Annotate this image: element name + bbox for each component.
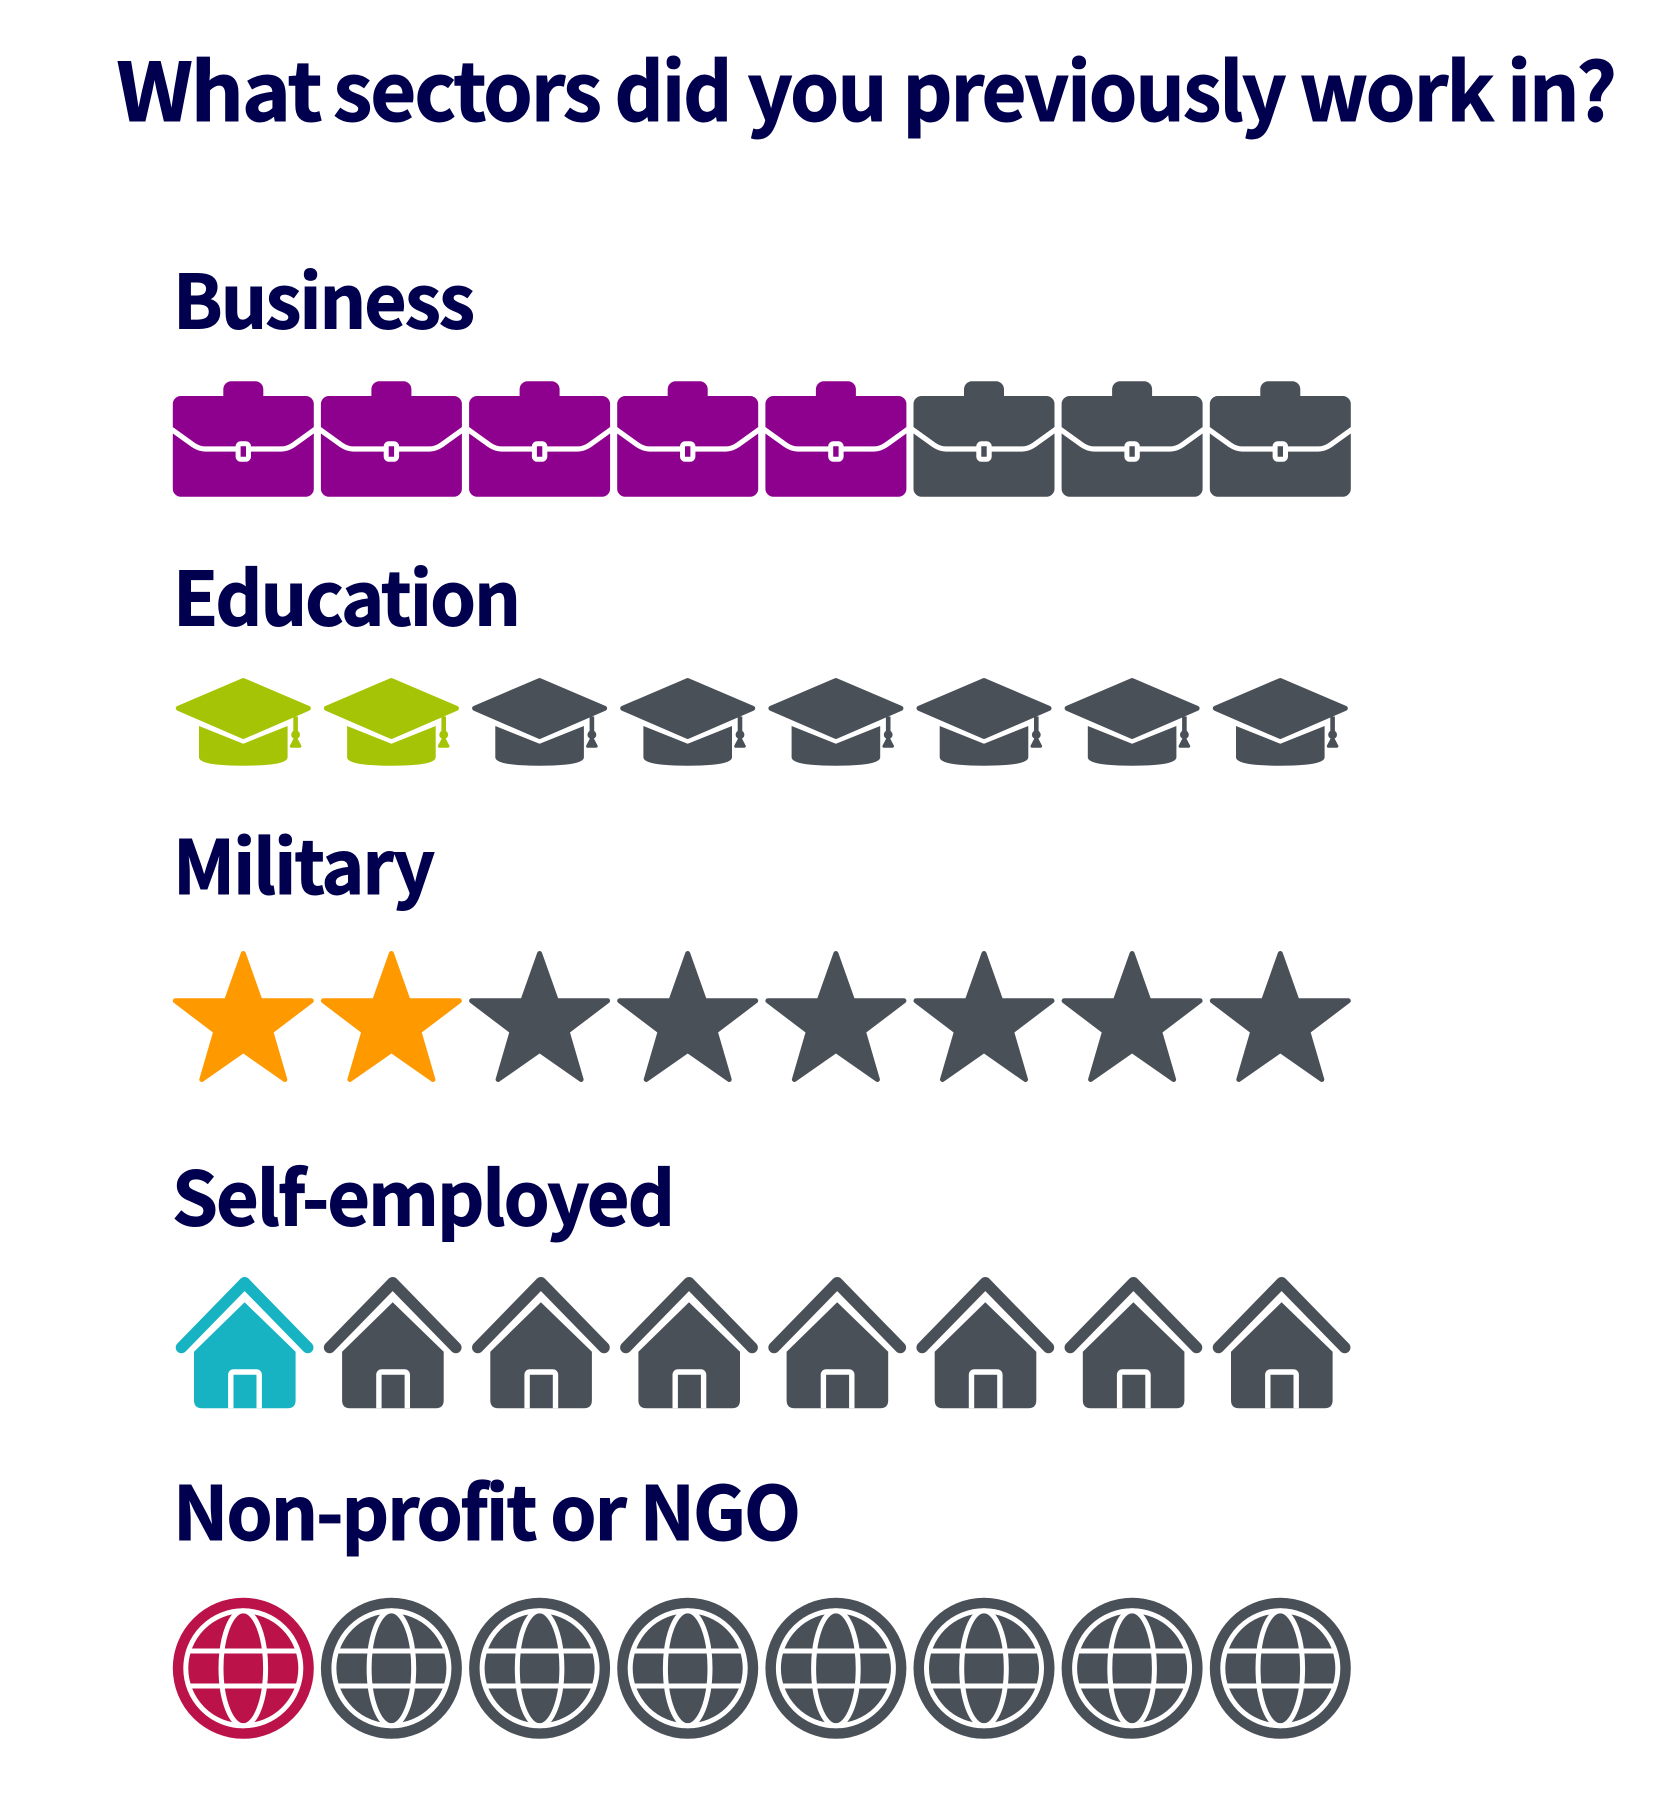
icon: graduation cap 1 [178,680,308,766]
icon: briefcase 1 [169,381,317,497]
icon: briefcase 5 [762,381,910,497]
icon: briefcase 2 [317,381,465,497]
icon: star 2 [323,954,459,1080]
icon: globe 7 [1062,1598,1203,1739]
title: in? [1507,29,1615,145]
heading: Non-profit or NGO: Non-profit or NGO [173,1455,799,1562]
heading: Self-employed: Self-employed [172,1140,673,1248]
icon: globe 4 [617,1598,758,1739]
icon: briefcase 6 [910,381,1058,497]
icon: star 8 [1212,954,1348,1080]
icon: house 8 [1218,1283,1345,1408]
icon: star 7 [1064,954,1200,1080]
icon: globe 8 [1210,1598,1351,1739]
title: sectors [333,29,600,145]
row: Self-employed icons, 1 of 8 highlighted [182,1283,1345,1408]
icon: house 1 [182,1283,308,1408]
heading: Education: Education [173,540,519,648]
title: work [1300,29,1494,145]
icon: graduation cap 6 [919,680,1049,766]
icon: house 3 [478,1283,604,1408]
title: did [614,29,730,145]
icon: briefcase 8 [1206,381,1354,497]
title: What [116,29,322,145]
icon: briefcase 4 [614,381,762,497]
icon: star 4 [620,954,756,1080]
icon: graduation cap 8 [1215,680,1345,766]
icon: globe 2 [321,1598,462,1739]
icon: globe 5 [765,1598,906,1739]
icon: star 1 [175,954,311,1080]
icon: graduation cap 2 [326,680,456,766]
icon: star 3 [472,954,608,1080]
icon: graduation cap 3 [475,680,605,766]
icon: graduation cap 4 [623,680,753,766]
icon: house 5 [774,1283,900,1408]
row: Education icons, 2 of 8 highlighted [178,680,1345,766]
icon: globe 3 [469,1598,610,1739]
row: Military icons, 2 of 8 highlighted [175,954,1348,1080]
icon: briefcase 7 [1058,381,1206,497]
heading: Military: Military [173,809,434,916]
icon: graduation cap 7 [1067,680,1197,766]
icon: globe 1 [173,1598,314,1739]
title: you [748,29,886,145]
icon: house 2 [330,1283,456,1408]
title: previously [902,29,1286,145]
row: Non-profit or NGO icons, 1 of 8 highlighted [173,1598,1351,1739]
icon: star 6 [916,954,1052,1080]
row: Business icons, 5 of 8 highlighted [169,381,1354,497]
icon: house 6 [922,1283,1048,1408]
icon: briefcase 3 [466,381,614,497]
icon: house 4 [626,1283,752,1408]
heading: Business: Business [173,244,473,350]
icon: star 5 [768,954,904,1080]
icon: globe 6 [914,1598,1054,1739]
icon: house 7 [1070,1283,1196,1408]
icon: graduation cap 5 [771,680,901,766]
